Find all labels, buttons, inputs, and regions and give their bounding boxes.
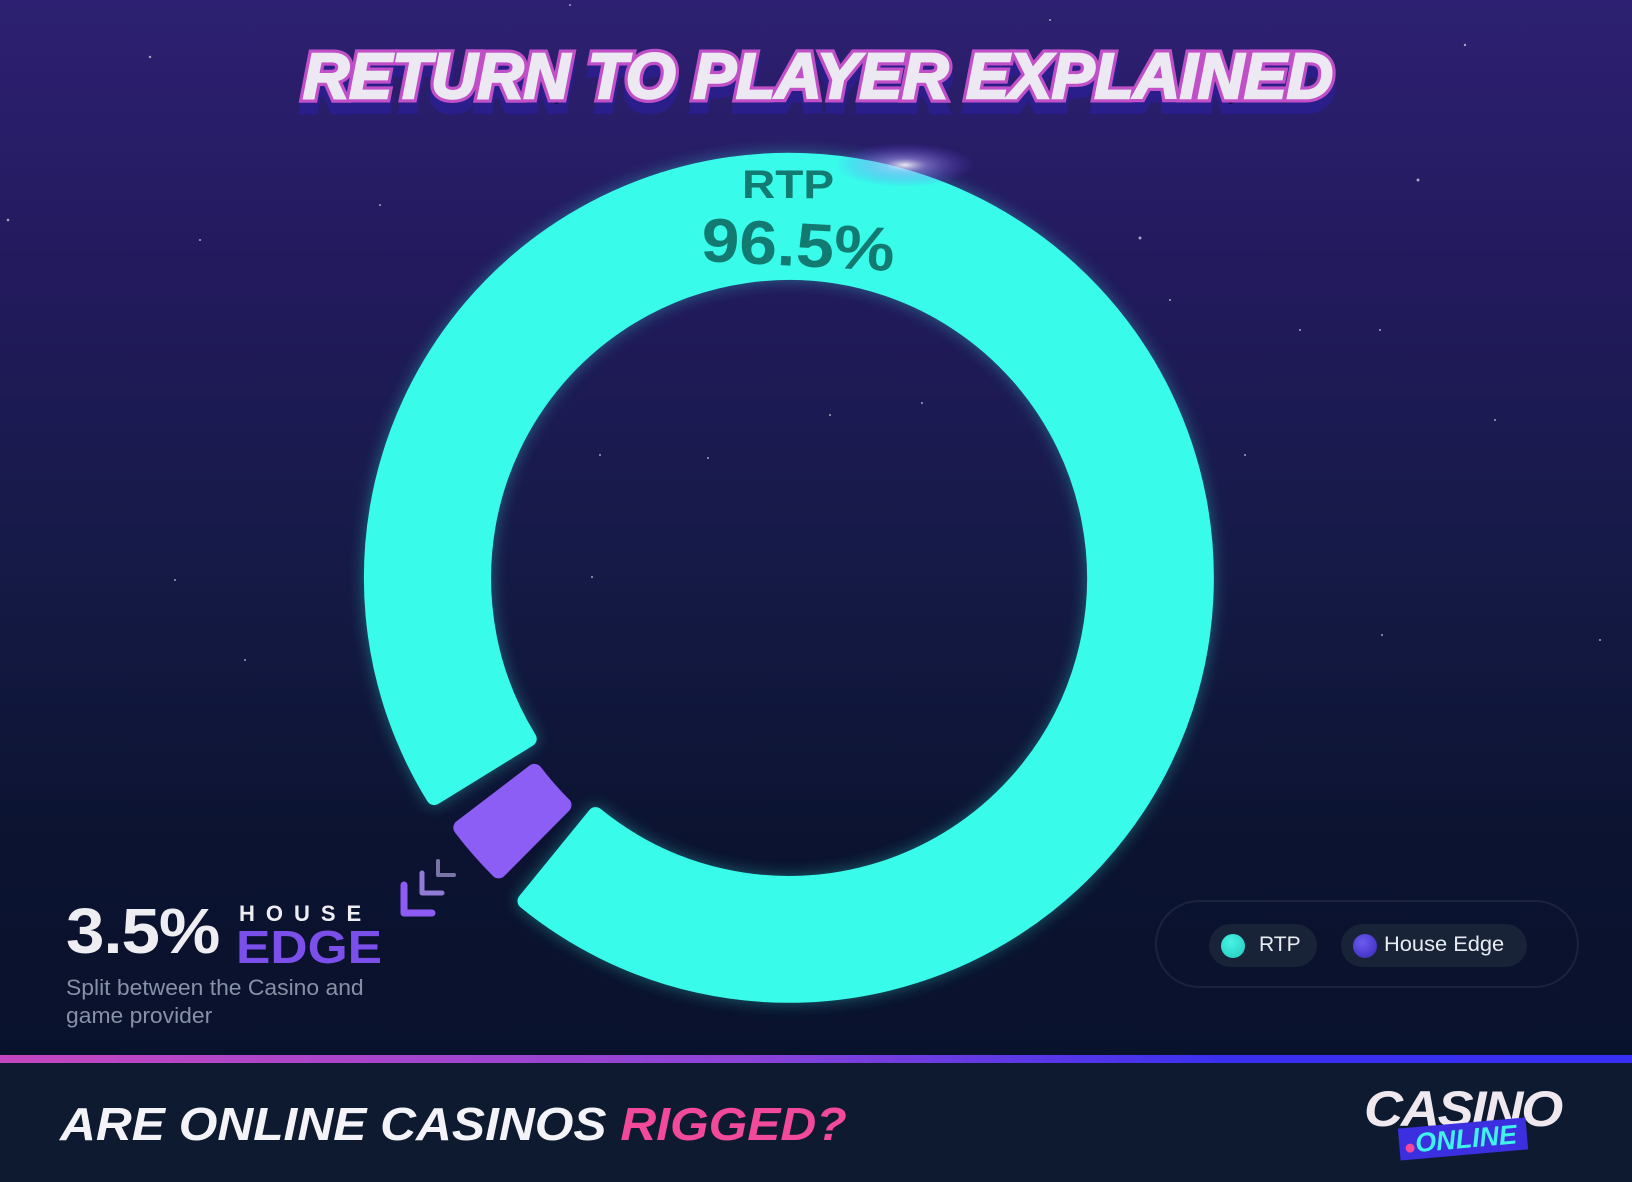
logo: ONLINE [1414, 1119, 1518, 1158]
footer headline: ARE ONLINE CASINOS RIGGED? [60, 1098, 847, 1150]
legend item: House Edge: House Edge [1384, 933, 1504, 956]
description: Split between the Casino and game provider [66, 975, 364, 1028]
RTP arc [372, 161, 1206, 995]
RTP value: 96.5% [700, 206, 896, 285]
logo [1364, 1081, 1562, 1160]
house edge segment [461, 772, 564, 870]
glow [835, 143, 975, 187]
title: RETURN TO PLAYER EXPLAINED [303, 40, 1333, 112]
edge label: EDGE [236, 921, 382, 973]
legend item: House Edge [1341, 924, 1527, 967]
logo: CASINO [1364, 1081, 1561, 1137]
icon: chevrons [400, 859, 456, 916]
legend item: RTP [1209, 924, 1317, 967]
title: RETURN TO PLAYER EXPLAINED [303, 40, 1333, 112]
legend item: RTP: RTP [1259, 933, 1301, 956]
house label: HOUSE [239, 901, 372, 926]
title: RETURN TO PLAYER EXPLAINED [303, 51, 1333, 123]
percent: 3.5% [66, 895, 219, 967]
RTP label: RTP [742, 163, 834, 207]
divider bar [0, 1055, 1632, 1063]
house edge callout [66, 895, 382, 1028]
footer [0, 1063, 1632, 1182]
legend [1155, 900, 1579, 988]
